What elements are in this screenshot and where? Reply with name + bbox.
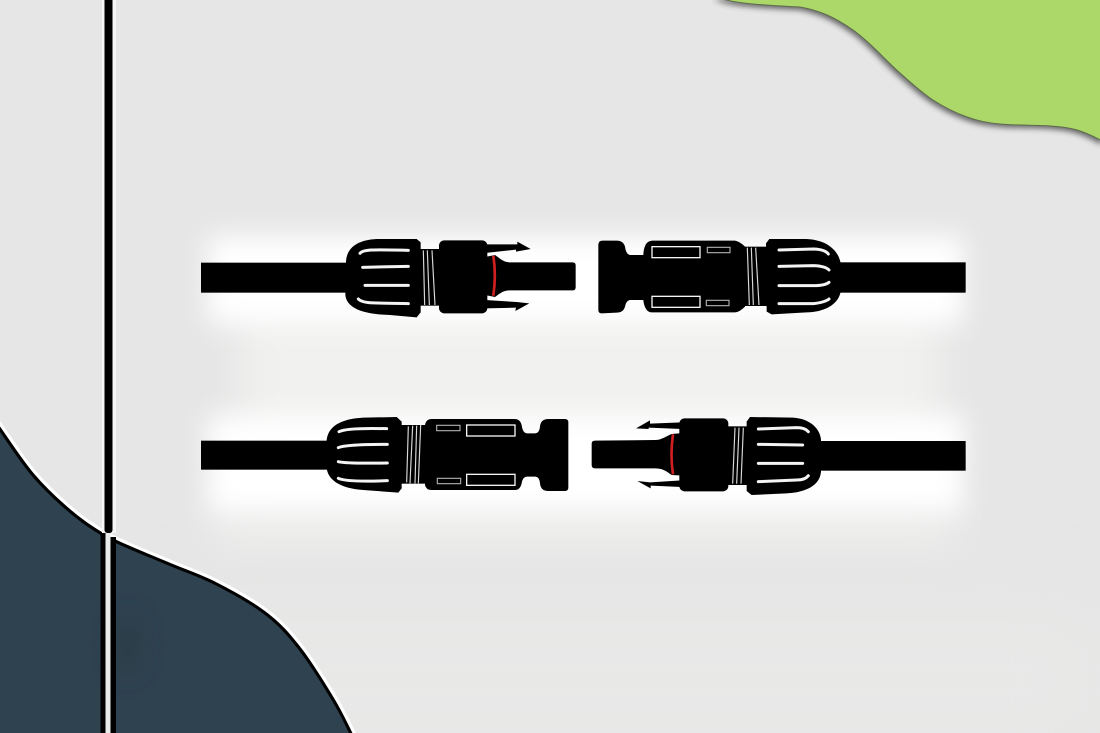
pin	[592, 433, 683, 476]
connector: bottom left female	[201, 417, 568, 493]
green corner shape	[714, 0, 1100, 145]
nut grip slots	[338, 428, 387, 481]
nut grip slots	[758, 428, 808, 482]
body windows	[652, 247, 730, 307]
thread	[743, 247, 767, 306]
gland nut	[747, 417, 821, 495]
locking clips	[485, 242, 531, 311]
cable	[837, 262, 966, 293]
cable	[818, 441, 966, 471]
red seal	[493, 256, 495, 296]
thread	[401, 425, 427, 484]
connector: bottom right male	[592, 417, 966, 495]
body	[598, 241, 745, 313]
nut grip slots	[358, 250, 408, 304]
connector: top left male	[201, 239, 576, 317]
nut grip slots	[779, 249, 829, 304]
dark blue corner shape	[0, 420, 354, 733]
body windows	[437, 425, 515, 485]
pin	[485, 255, 576, 297]
cable	[201, 441, 331, 470]
gland nut	[766, 239, 841, 314]
white glow behind connectors	[140, 236, 1100, 733]
vertical line, lower split segment	[100, 533, 116, 733]
gland nut	[327, 417, 402, 493]
body	[425, 419, 568, 491]
thread	[420, 249, 441, 306]
body	[679, 418, 728, 491]
connector: top right female	[598, 239, 966, 314]
red seal	[671, 434, 673, 474]
cable	[201, 263, 351, 293]
thread	[728, 426, 748, 485]
gland nut	[345, 239, 421, 317]
vertical line, upper black segment	[102, 0, 116, 533]
body	[439, 240, 487, 313]
locking clips	[636, 420, 682, 488]
